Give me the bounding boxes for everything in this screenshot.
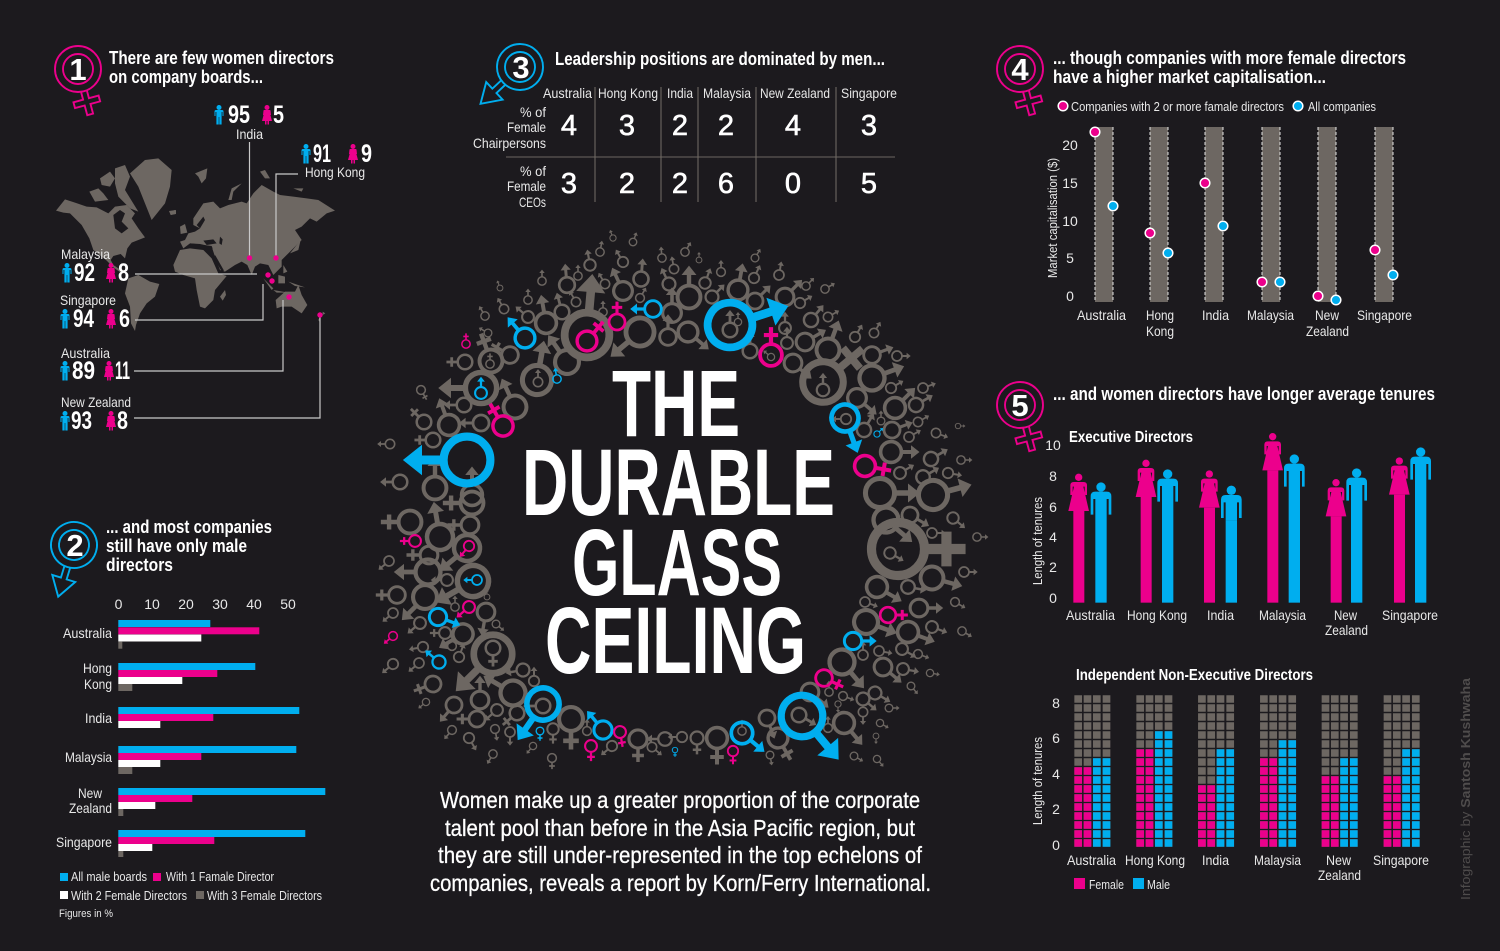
intro paragraph: Women make up a greater proportion of the corporate	[440, 787, 920, 813]
intro paragraph	[430, 787, 931, 896]
stat: Hong Kong: Hong Kong	[305, 164, 365, 180]
stat: India: 95	[228, 101, 250, 129]
table values: 2	[672, 168, 688, 200]
table values: 3	[861, 110, 877, 142]
bar labels: Singapore	[56, 834, 112, 850]
axis ticks: 0	[1066, 288, 1074, 304]
table values: 4	[785, 110, 801, 142]
axis ticks: 0	[1049, 590, 1057, 606]
table values	[561, 110, 877, 200]
heading 1: There are few women directors	[109, 48, 334, 68]
dot chart bands	[1095, 127, 1393, 302]
axis ticks: 4	[1052, 766, 1060, 782]
table grid	[506, 87, 895, 202]
x labels	[1077, 307, 1412, 339]
badge 1	[55, 46, 103, 118]
legend	[59, 870, 322, 920]
title: GLASS	[572, 510, 782, 616]
bar labels: Zealand	[69, 800, 112, 816]
legend: With 2 Female Directors	[71, 889, 187, 903]
icon ring: gender symbols	[375, 229, 988, 773]
bar chart	[118, 620, 325, 857]
panel: 4 market capitalisation	[997, 46, 1412, 339]
stat: Malaysia: Malaysia	[61, 246, 110, 262]
location dots	[247, 255, 323, 318]
heading 5: ... and women directors have longer average tenures	[1053, 384, 1435, 404]
axis ticks: 8	[1052, 695, 1060, 711]
credit: Infographic by Santosh Kushwaha	[1458, 677, 1473, 900]
row headers	[473, 104, 546, 210]
column headers: Singapore	[841, 85, 897, 101]
axis ticks: 15	[1062, 175, 1078, 191]
legend: All male boards	[71, 870, 147, 884]
badge 2	[36, 516, 103, 603]
axis label: Length of tenures	[1030, 737, 1045, 825]
heading 2: ... and most companies	[106, 517, 272, 537]
stat: Hong Kong: 91	[313, 140, 331, 168]
stat: Australia: 89	[72, 357, 95, 385]
row headers: % of	[520, 104, 546, 120]
x labels: India	[1202, 852, 1229, 868]
panel: 1 few women directors	[55, 46, 372, 435]
heading 2: still have only male	[106, 536, 247, 556]
row headers: CEOs	[519, 194, 546, 210]
axis ticks: 10	[1045, 437, 1061, 453]
bar labels: Australia	[63, 625, 112, 641]
x labels: Australia	[1077, 307, 1126, 323]
badge 5	[997, 382, 1045, 454]
heading 4	[1053, 48, 1406, 87]
legend: Female	[1089, 878, 1124, 892]
stat: Malaysia	[61, 246, 129, 287]
axis ticks: 6	[1049, 499, 1057, 515]
x labels: Malaysia	[1259, 607, 1306, 623]
axis label: Market capitalisation ($)	[1045, 158, 1060, 278]
axis ticks: 10	[1062, 213, 1078, 229]
x labels: Singapore	[1382, 607, 1438, 623]
heading 1	[109, 48, 334, 87]
bar labels: Malaysia	[65, 749, 112, 765]
axis ticks	[1062, 137, 1078, 304]
column headers: India	[667, 85, 693, 101]
x labels: Malaysia	[1247, 307, 1294, 323]
x labels: Malaysia	[1254, 852, 1301, 868]
stat: India	[214, 101, 284, 142]
axis ticks: 8	[1049, 468, 1057, 484]
stat: Singapore: Singapore	[60, 292, 116, 308]
table values: 2	[672, 110, 688, 142]
intro paragraph: companies, reveals a report by Korn/Ferry International.	[430, 870, 931, 896]
data dots	[1090, 127, 1398, 305]
axis ticks: 5	[1066, 250, 1074, 266]
legend: Male	[1147, 878, 1170, 892]
panel: 2 male-only boards	[36, 516, 325, 920]
legend: With 1 Famale Director	[166, 870, 274, 884]
stat: India: 5	[273, 101, 284, 129]
x labels: New	[1315, 307, 1340, 323]
bar labels: India	[85, 710, 112, 726]
x labels: Singapore	[1373, 852, 1429, 868]
axis ticks	[1045, 437, 1061, 606]
x labels: Hong	[1146, 307, 1174, 323]
person bars	[1068, 433, 1431, 603]
axis ticks: 4	[1049, 529, 1057, 545]
heading 2: directors	[106, 555, 173, 575]
title: DURABLE	[522, 430, 835, 536]
axis label: Length of tenures	[1030, 497, 1045, 585]
waffle chart	[1078, 695, 1416, 847]
legend: Figures in %	[59, 908, 113, 920]
table values: 5	[861, 168, 877, 200]
heading 1: on company boards...	[109, 67, 263, 87]
badge 4	[997, 46, 1045, 118]
stat: New Zealand	[60, 394, 131, 435]
bar labels	[56, 625, 112, 850]
badge 1: 1	[69, 52, 87, 87]
badge 2: 2	[66, 528, 84, 563]
axis ticks: 2	[1049, 559, 1057, 575]
stat: Malaysia: 92	[74, 259, 95, 287]
x labels: Kong	[1146, 323, 1174, 339]
heading 4: ... though companies with more female directors	[1053, 48, 1406, 68]
heading 3: Leadership positions are dominated by men...	[555, 49, 885, 69]
bar labels: Hong	[83, 660, 112, 676]
stat: Australia: 11	[115, 357, 130, 385]
x labels: Singapore	[1357, 307, 1412, 323]
column headers	[543, 85, 897, 101]
axis ticks: 20	[178, 596, 194, 612]
table values: 0	[785, 168, 801, 200]
table values: 3	[619, 110, 635, 142]
axis ticks	[1052, 695, 1060, 853]
table values: 6	[718, 168, 734, 200]
badge 3	[465, 34, 553, 121]
x labels: Hong Kong	[1125, 852, 1185, 868]
row headers: Female	[507, 178, 546, 194]
legend: Companies with 2 or more famale directors	[1071, 100, 1284, 114]
axis ticks: 0	[1052, 837, 1060, 853]
bar labels: Kong	[84, 676, 112, 692]
subheading: independent directors: Independent Non-Executive Directors	[1076, 667, 1313, 684]
stat: Hong Kong	[302, 140, 372, 180]
x labels: New	[1326, 852, 1352, 868]
callout lines	[134, 142, 320, 418]
stat: Hong Kong: 9	[361, 140, 372, 168]
x labels: Hong Kong	[1127, 607, 1187, 623]
legend	[1074, 878, 1170, 892]
legend: All companies	[1308, 100, 1376, 114]
bar labels: New	[78, 785, 103, 801]
x labels: Australia	[1066, 607, 1115, 623]
stat: Singapore: 94	[73, 305, 94, 333]
table values: 4	[561, 110, 577, 142]
intro paragraph: talent pool than before in the Asia Pacific region, but	[445, 815, 916, 841]
stat: Australia	[60, 345, 130, 385]
x labels: India	[1202, 307, 1229, 323]
stat: Singapore	[60, 292, 130, 333]
axis ticks: 0	[115, 596, 123, 612]
column headers: Hong Kong	[598, 85, 658, 101]
x labels	[1066, 607, 1438, 638]
legend: With 3 Female Directors	[207, 889, 322, 903]
stat: New Zealand: 93	[71, 407, 92, 435]
axis ticks: 20	[1062, 137, 1078, 153]
title: THE	[612, 351, 740, 457]
row headers: Chairpersons	[473, 135, 546, 151]
stat: New Zealand: New Zealand	[61, 394, 131, 410]
axis ticks: 2	[1052, 801, 1060, 817]
stat: Australia: Australia	[61, 345, 110, 361]
axis ticks: 10	[144, 596, 160, 612]
panel: 5 tenures	[997, 382, 1438, 892]
x labels: New	[1334, 607, 1358, 623]
title: CEILING	[545, 588, 806, 694]
x labels: Zealand	[1325, 622, 1368, 638]
table values: 2	[718, 110, 734, 142]
axis ticks	[115, 596, 296, 612]
table values: 2	[619, 168, 635, 200]
world map	[56, 158, 335, 331]
intro paragraph: they are still under-represented in the top echelons of	[438, 842, 923, 868]
x labels: Zealand	[1318, 867, 1361, 883]
column headers: Australia	[543, 85, 592, 101]
subheading: executive directors: Executive Directors	[1069, 429, 1193, 446]
row headers: Female	[507, 119, 546, 135]
x labels: Zealand	[1306, 323, 1349, 339]
badge 3: 3	[512, 50, 530, 85]
table values: 3	[561, 168, 577, 200]
axis ticks: 50	[280, 596, 296, 612]
axis ticks: 6	[1052, 730, 1060, 746]
column headers: New Zealand	[760, 85, 830, 101]
stat: India: India	[236, 126, 263, 142]
x labels: Australia	[1067, 852, 1116, 868]
axis ticks: 40	[246, 596, 262, 612]
stat: New Zealand: 8	[117, 407, 128, 435]
panel: 3 leadership table	[465, 34, 897, 210]
row headers: % of	[520, 163, 546, 179]
x labels: India	[1207, 607, 1234, 623]
title	[522, 351, 835, 694]
badge 5: 5	[1011, 388, 1029, 423]
x labels	[1067, 852, 1429, 883]
heading 2	[106, 517, 272, 575]
stat: Malaysia: 8	[118, 259, 129, 287]
badge 4: 4	[1011, 52, 1029, 87]
axis ticks: 30	[212, 596, 228, 612]
heading 4: have a higher market capitalisation...	[1053, 67, 1326, 87]
stat: Singapore: 6	[119, 305, 130, 333]
column headers: Malaysia	[703, 85, 751, 101]
